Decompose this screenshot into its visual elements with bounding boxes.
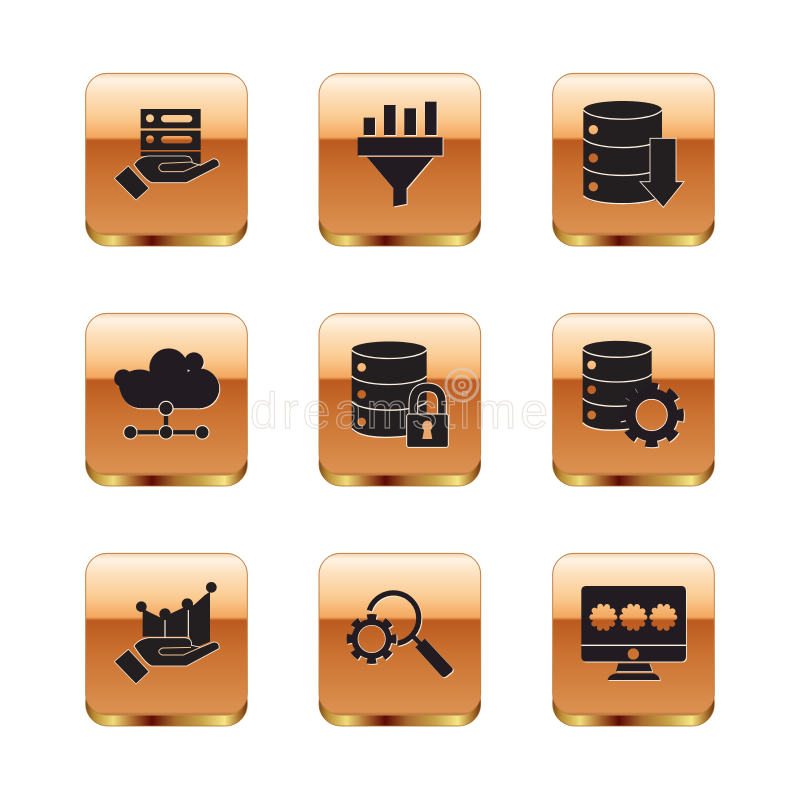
icon: magnifier with gear <box>350 593 453 677</box>
panel: chart in hand button <box>86 553 247 726</box>
icon: database with gear <box>583 341 680 443</box>
icon: server on open hand <box>114 109 219 200</box>
panel: funnel with bars button <box>319 73 481 246</box>
panel: monitor password button <box>553 553 714 726</box>
icon: database with padlock <box>352 341 448 447</box>
panel: database settings button <box>553 313 714 486</box>
icon: database with down arrow <box>583 101 684 207</box>
icon: data filter funnel <box>358 102 443 207</box>
icon: cloud with network nodes <box>114 348 219 439</box>
icon: line chart on open hand <box>114 582 219 684</box>
panel: cloud network button <box>86 313 247 486</box>
watermark: dreamstime <box>250 383 548 439</box>
panel: gear search button <box>319 553 481 726</box>
icon: monitor with password asterisks <box>581 586 686 680</box>
panel: database lock button <box>319 313 481 486</box>
panel: database download button <box>553 73 714 246</box>
panel: server in hand button <box>86 73 247 246</box>
